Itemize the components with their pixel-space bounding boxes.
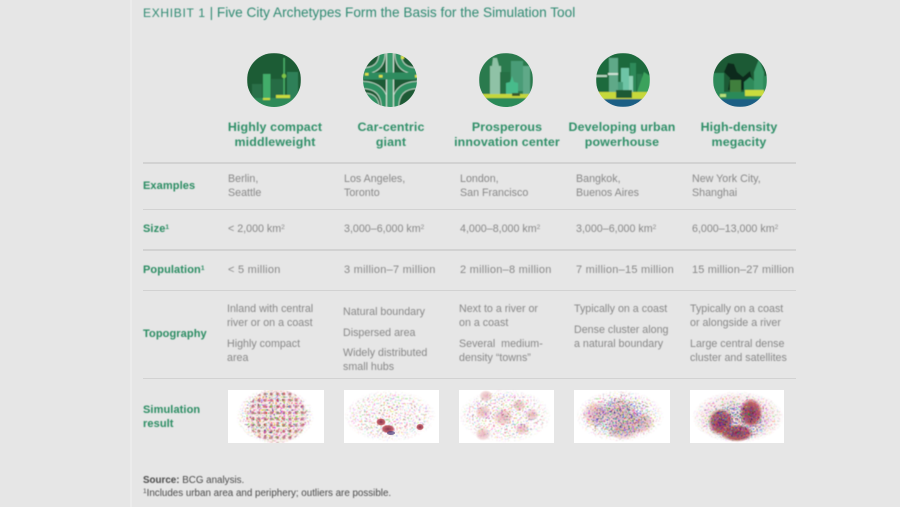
topography: megacity: or alongside a river Large central dense xyxy=(690,316,784,350)
examples: compact middleweight: Seattle xyxy=(228,186,261,198)
heading: compact middleweight: middleweight xyxy=(235,134,315,148)
examples: urban powerhouse xyxy=(576,172,639,198)
heading: urban powerhouse: Developing urban xyxy=(568,120,676,134)
size: compact middleweight: < 2,000 km2 xyxy=(228,223,285,235)
topography: compact middleweight: Inland with central xyxy=(227,302,313,314)
source and footnote: 1Includes urban area and periphery; outliers are possible. xyxy=(143,488,391,499)
examples: urban powerhouse: Buenos Aires xyxy=(576,186,639,198)
icon: compact city skyline xyxy=(247,53,301,108)
topography: urban powerhouse xyxy=(574,302,668,350)
topography: megacity: Typically on a coast xyxy=(690,302,783,314)
topography: compact middleweight xyxy=(227,302,313,364)
examples: compact middleweight: Berlin, xyxy=(228,172,258,184)
simulation map: compact middleweight xyxy=(228,388,324,444)
simulation map: innovation center xyxy=(459,389,554,443)
label: population: Population1 xyxy=(143,264,205,276)
heading: car-centric giant xyxy=(357,120,425,150)
population: car-centric giant: 3 million–7 million xyxy=(344,264,436,276)
row: population xyxy=(142,264,794,276)
examples: megacity xyxy=(692,172,761,199)
heading: urban powerhouse: powerhouse xyxy=(585,134,659,148)
source and footnote xyxy=(142,475,391,499)
topography: car-centric giant: Natural boundary Dispersed area Widely distributed xyxy=(343,306,427,358)
heading: innovation center xyxy=(454,120,560,148)
topography: compact middleweight: river or on a coast Highly compact xyxy=(227,316,313,350)
examples: innovation center xyxy=(460,172,528,198)
topography: car-centric giant: small hubs xyxy=(343,360,394,372)
topography: innovation center: Next to a river or xyxy=(459,302,538,314)
label: simulation result: Simulation xyxy=(143,404,200,416)
population: innovation center: 2 million–8 million xyxy=(460,264,552,276)
heading: car-centric giant: giant xyxy=(376,134,406,148)
population: megacity: 15 million–27 million xyxy=(692,264,794,276)
size: urban powerhouse: 3,000–6,000 km2 xyxy=(576,223,656,235)
label: simulation result: result xyxy=(143,418,174,430)
examples: car-centric giant: Toronto xyxy=(344,186,380,198)
topography: compact middleweight: area xyxy=(227,352,248,364)
examples: megacity: Shanghai xyxy=(692,186,737,198)
examples: megacity: New York City, xyxy=(692,172,761,184)
heading: compact middleweight: Highly compact xyxy=(228,120,322,134)
examples: innovation center: San Francisco xyxy=(460,186,528,198)
topography: megacity: cluster and satellites xyxy=(690,352,787,364)
label: simulation result xyxy=(142,404,200,430)
icon: megacity skyline xyxy=(713,53,767,107)
examples: urban powerhouse: Bangkok, xyxy=(576,172,621,184)
archetype icons and simulation maps xyxy=(228,53,784,443)
population: compact middleweight: < 5 million xyxy=(228,264,281,276)
heading: innovation center: Prosperous xyxy=(472,120,542,134)
heading: car-centric giant: Car-centric xyxy=(357,120,425,134)
row: topography xyxy=(142,302,787,372)
size: innovation center: 4,000–8,000 km2 xyxy=(460,223,540,235)
icon: innovation center skyline xyxy=(479,53,533,108)
topography: innovation center: on a coast Several medium- xyxy=(459,316,543,350)
topography: innovation center: density “towns” xyxy=(459,352,531,364)
row: examples xyxy=(142,172,761,199)
heading: innovation center: innovation center xyxy=(454,134,560,148)
heading: compact middleweight xyxy=(228,120,322,150)
size: car-centric giant: 3,000–6,000 km2 xyxy=(344,223,424,235)
icon: highway interchange xyxy=(362,52,418,108)
heading: megacity: megacity xyxy=(712,134,766,148)
title: EXHIBIT 1 | Five City Archetypes Form the Basis for the Simulation Tool xyxy=(143,5,575,20)
topography: urban powerhouse: a natural boundary xyxy=(574,338,663,350)
source and footnote: Source: BCG analysis. xyxy=(143,475,244,486)
archetype headings xyxy=(228,120,778,150)
examples: compact middleweight xyxy=(228,172,262,198)
simulation map: car-centric giant xyxy=(344,390,439,443)
examples: innovation center: London, xyxy=(460,172,499,184)
row: size xyxy=(142,223,778,235)
label: size: Size1 xyxy=(143,223,169,235)
simulation map: urban powerhouse xyxy=(574,390,670,443)
topography: urban powerhouse: Typically on a coast Dense cluster along xyxy=(574,302,668,336)
label: topography: Topography xyxy=(143,328,207,340)
topography: innovation center xyxy=(458,302,543,364)
examples: car-centric giant: Los Angeles, xyxy=(344,172,405,184)
label: examples: Examples xyxy=(143,180,195,192)
icon: urban powerhouse skyline xyxy=(596,53,650,107)
heading: urban powerhouse xyxy=(568,120,676,150)
population: urban powerhouse: 7 million–15 million xyxy=(576,264,674,276)
heading: megacity: High-density xyxy=(701,120,777,134)
topography: megacity xyxy=(690,302,787,364)
heading: megacity xyxy=(700,120,778,150)
size: megacity: 6,000–13,000 km2 xyxy=(692,223,778,235)
simulation map: high-density megacity xyxy=(690,390,784,443)
examples: car-centric giant xyxy=(344,172,405,198)
